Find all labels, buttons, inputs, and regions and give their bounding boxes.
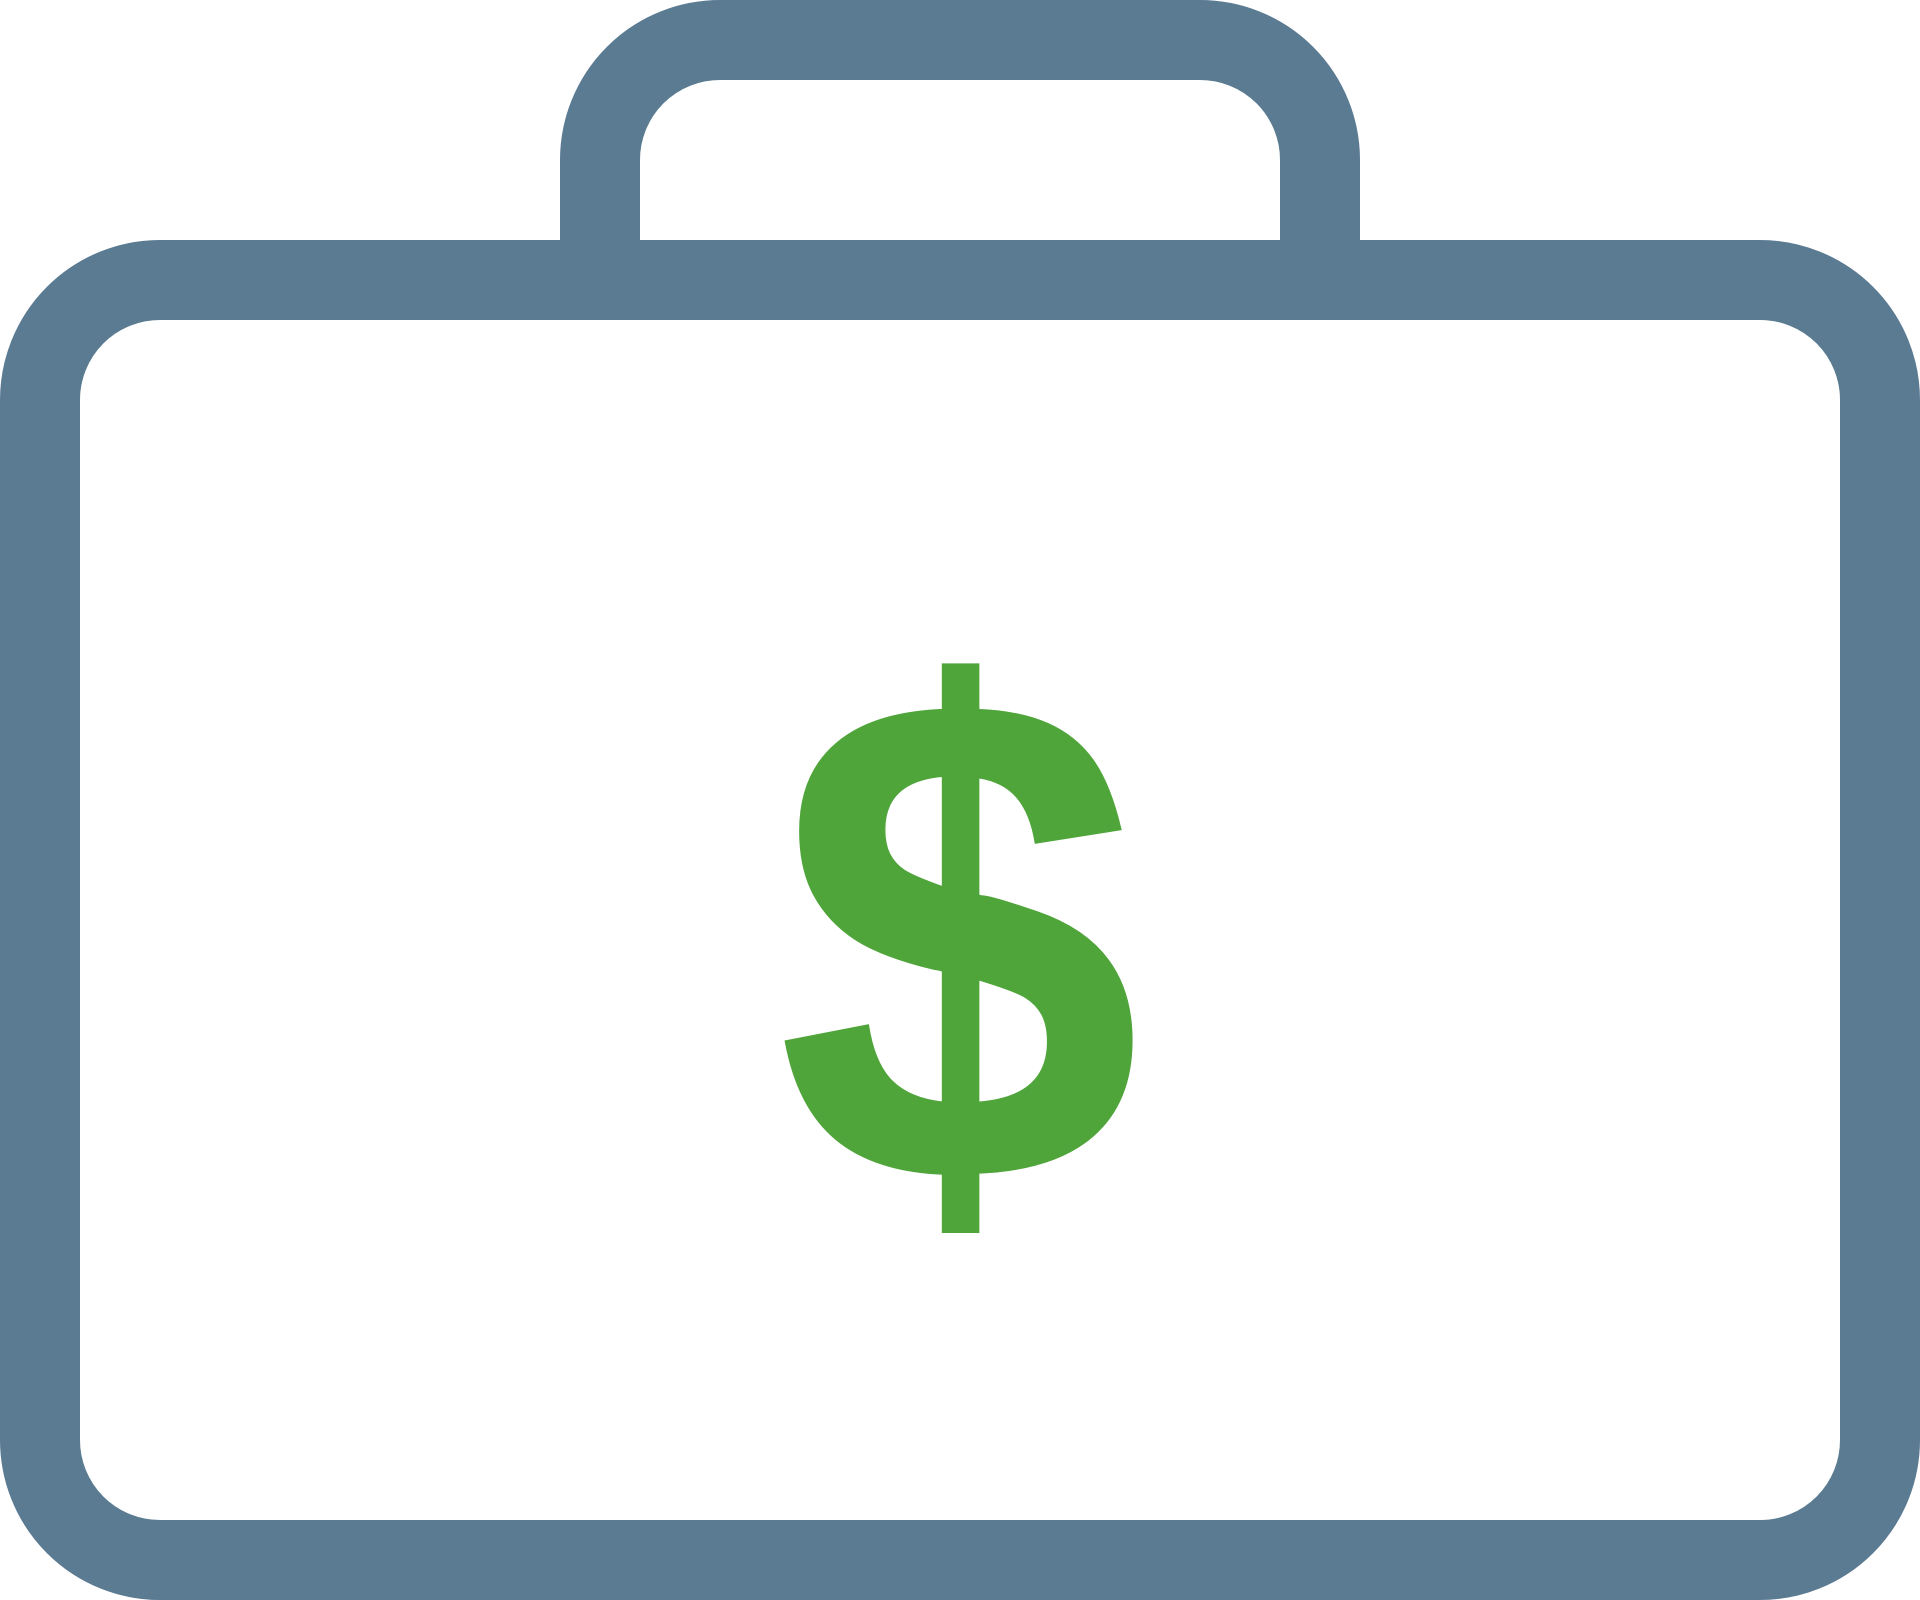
dollar sign: $ bbox=[778, 551, 1140, 1327]
icon: briefcase handle bbox=[600, 40, 1320, 280]
icon: briefcase body bbox=[40, 280, 1880, 1560]
